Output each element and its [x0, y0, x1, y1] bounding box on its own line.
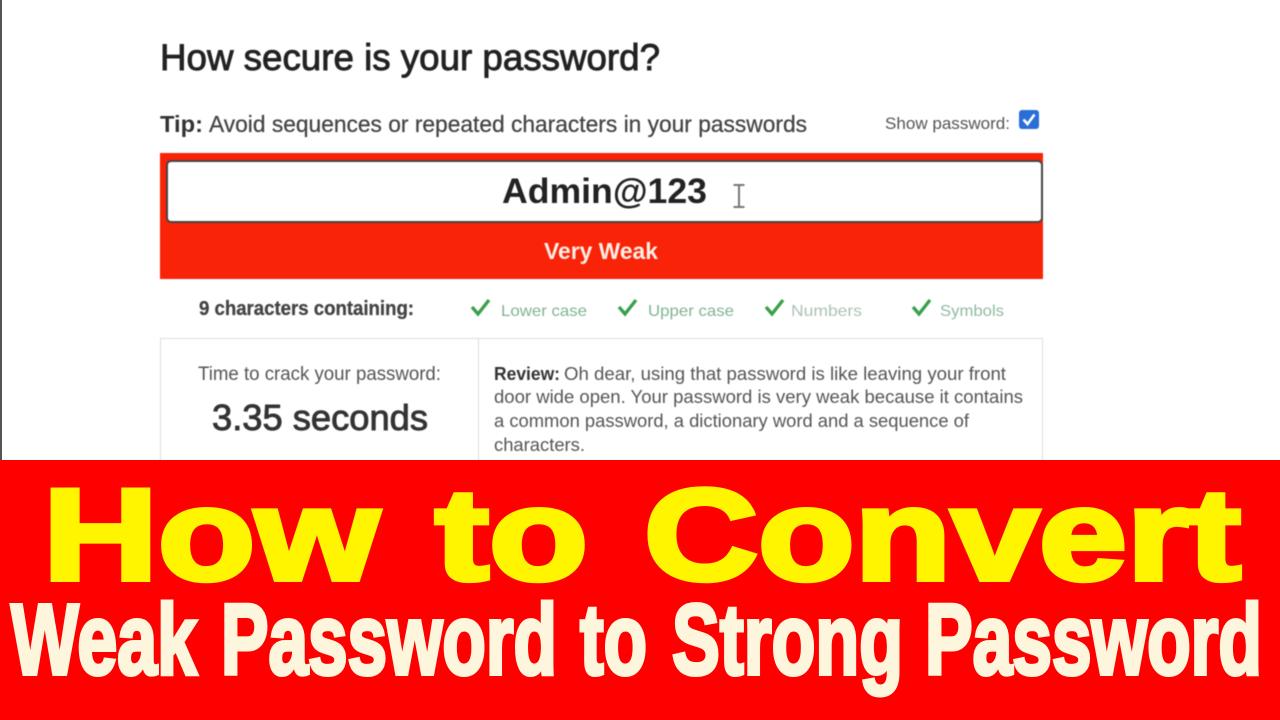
show password label: Show password:	[885, 115, 1010, 133]
review panel	[478, 338, 1042, 468]
screenshot panel: password checker	[160, 37, 1043, 468]
check: lower case: Lower case	[501, 303, 587, 320]
title line 2: Password	[221, 584, 557, 696]
title banner	[0, 460, 1280, 720]
crack time value: 3.35 seconds	[212, 397, 428, 438]
password panel	[160, 153, 1043, 279]
title line 1	[43, 462, 1241, 608]
title line 1: Convert	[644, 462, 1241, 608]
review text: characters.	[494, 434, 585, 455]
tip text: Tip:	[160, 111, 203, 137]
crack time panel	[160, 338, 478, 468]
strength label: Very Weak	[544, 238, 658, 264]
check: symbols: Symbols	[940, 303, 1004, 320]
crack time label: Time to crack your password:	[198, 364, 441, 385]
review text: a common password, a dictionary word and a sequence of	[494, 410, 970, 431]
left window edge	[0, 0, 2, 460]
title line 2: Strong	[672, 584, 903, 696]
check: numbers: Numbers	[791, 303, 862, 320]
check: upper case: Upper case	[648, 303, 734, 320]
cursor icon	[734, 185, 744, 207]
title line 1: How	[43, 462, 380, 608]
title line 2: Weak	[11, 584, 197, 696]
heading: How secure is your password?	[160, 37, 660, 78]
review text: door wide open. Your password is very weak because it contains	[494, 386, 1023, 407]
check: lower case	[472, 300, 587, 320]
password input	[167, 161, 1042, 222]
title line 2	[11, 584, 1262, 696]
tip text: Avoid sequences or repeated characters in your passwords	[209, 111, 807, 137]
check: numbers	[766, 300, 862, 320]
review text	[494, 363, 1023, 455]
review text: Oh dear, using that password is like leaving your front	[564, 363, 1006, 384]
check: symbols	[913, 300, 1004, 320]
review text: Review:	[494, 363, 560, 384]
character count: 9 characters containing:	[199, 298, 414, 320]
title line 2: to	[580, 584, 647, 696]
check: upper case	[619, 300, 734, 320]
password value: Admin@123	[502, 172, 707, 211]
checkbox	[1019, 110, 1039, 129]
title line 1: to	[435, 462, 588, 608]
